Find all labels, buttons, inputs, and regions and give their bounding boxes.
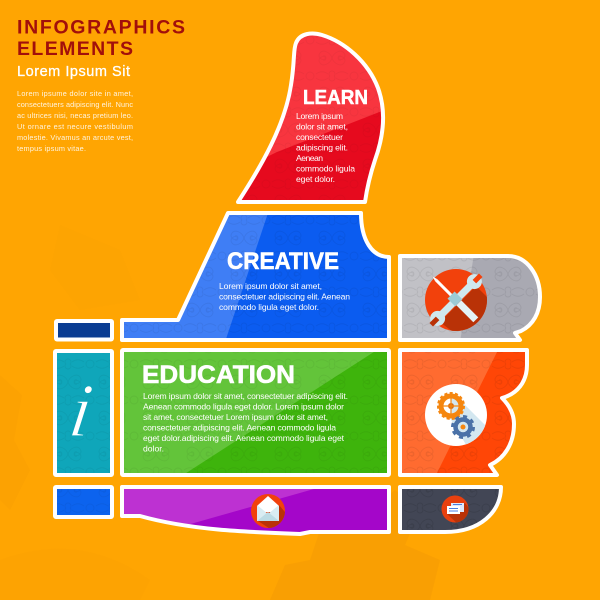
panel: learn xyxy=(236,32,386,204)
panel: gears xyxy=(398,348,530,478)
panel: tools xyxy=(398,254,543,345)
title: INFOGRAPHICS xyxy=(17,16,185,38)
text: learn body xyxy=(296,111,355,184)
panel: information xyxy=(55,351,112,475)
panel: blue small block xyxy=(55,487,112,517)
text: learn body: adipiscing elit. xyxy=(296,142,348,152)
text: creative body xyxy=(219,281,350,312)
subtitle: Lorem Ipsum Sit xyxy=(17,64,130,80)
intro text block: Lorem ipsume dolor site in amet, xyxy=(17,89,133,98)
icon: envelope xyxy=(251,494,285,528)
icon: gears xyxy=(425,384,490,448)
icon: chat bubbles xyxy=(442,496,468,522)
text: learn body: dolor sit amet, xyxy=(296,122,348,132)
intro text block xyxy=(17,89,133,153)
text: education body: Lorem ipsum dolor sit amet, consectetuer adipiscing elit. xyxy=(143,391,348,401)
text: creative body: consectetuer adipiscing elit. Aenean xyxy=(219,292,350,302)
text: learn body: eget dolor. xyxy=(296,174,335,184)
intro text block: Ut ornare est necure vestibulum xyxy=(17,122,133,131)
intro text block: ac ultrices nisi, necas pretium leo. xyxy=(17,111,133,120)
text: education body: sit amet, consectetuer Lorem ipsum dolor sit amet, xyxy=(143,412,328,422)
text: learn body: Lorem ipsum xyxy=(296,111,343,121)
text: learn body: consectetuer xyxy=(296,132,343,142)
text: creative body: commodo ligula eget dolor. xyxy=(219,302,319,312)
text: education body xyxy=(143,391,348,454)
text: education body: Aenean commodo ligula eget dolor. Lorem ipsum dolor xyxy=(143,402,344,412)
heading: creative: CREATIVE xyxy=(227,248,339,275)
icon: italic i: i xyxy=(65,368,98,453)
text: education body: dolor. xyxy=(143,444,164,454)
icon: wrench and screwdriver xyxy=(425,269,487,331)
panel: messages xyxy=(398,485,503,534)
heading: education: EDUCATION xyxy=(142,361,295,389)
panel: mail xyxy=(120,485,389,534)
text: education body: consectetuer adipiscing elit. Aenean commodo ligula xyxy=(143,422,336,432)
title xyxy=(17,16,185,60)
text: learn body: commodo ligula xyxy=(296,164,355,174)
intro text block: molestie. Vivamus an arcute vest, xyxy=(17,133,133,142)
text: creative body: Lorem ipsum dolor sit amet, xyxy=(219,281,322,291)
panel: navy thumb block xyxy=(56,321,112,340)
heading: learn: LEARN xyxy=(303,87,368,109)
panel: creative xyxy=(120,210,392,342)
text: learn body: Aenean xyxy=(296,153,323,163)
panel: education xyxy=(120,348,392,478)
text: education body: eget dolor.adipiscing elit. Aenean commodo ligula eget xyxy=(143,433,345,443)
title: ELEMENTS xyxy=(17,38,133,60)
intro text block: consectetuers adipiscing elit. Nunc xyxy=(17,100,133,109)
intro text block: tempus ipsum vitae. xyxy=(17,144,86,153)
